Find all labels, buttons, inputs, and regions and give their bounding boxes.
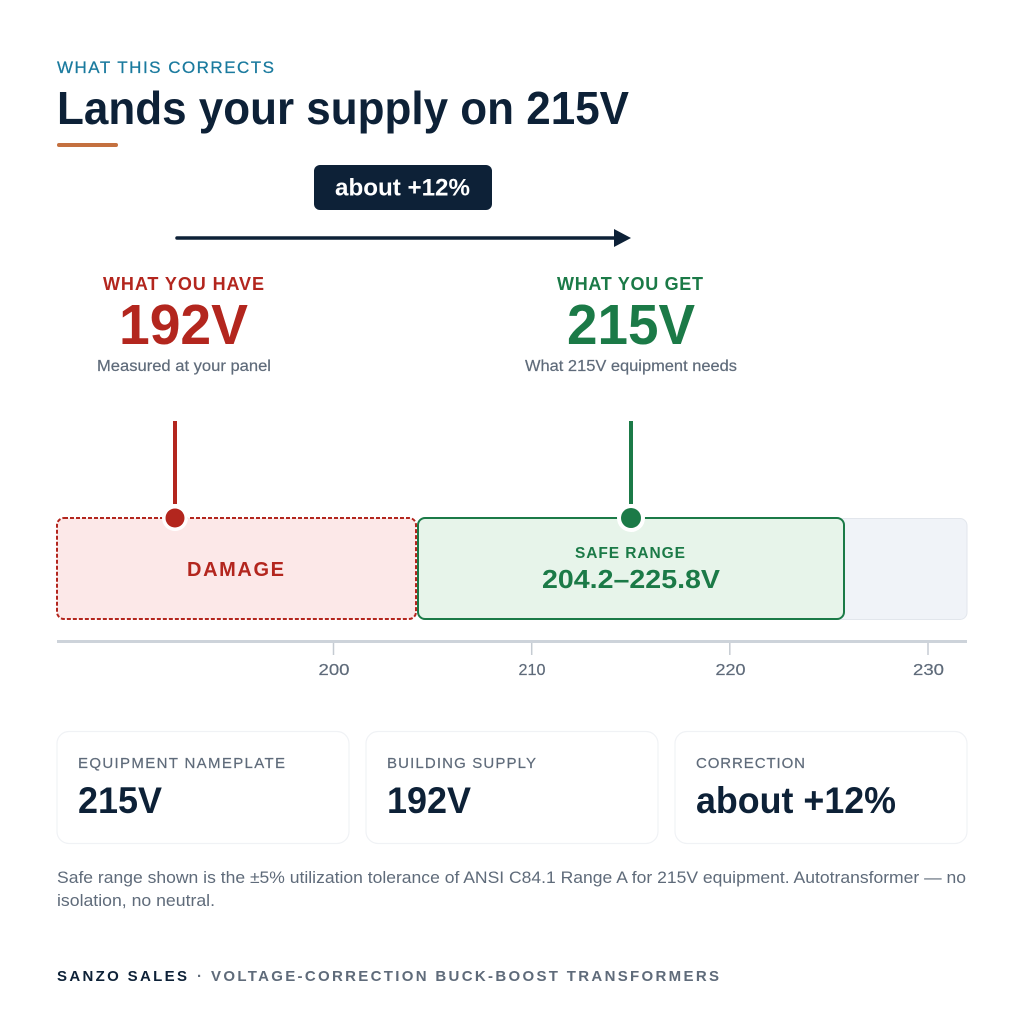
callout: what you have: 192V (119, 293, 248, 357)
card: building supply: 192V (387, 780, 471, 821)
band: safe range (418, 518, 844, 619)
voltage axis: 220 (716, 662, 746, 679)
card: correction (675, 732, 967, 844)
callout: what you get: What 215V equipment needs (525, 358, 737, 375)
band: damage zone: DAMAGE (187, 559, 284, 581)
footer brand line: VOLTAGE-CORRECTION BUCK-BOOST TRANSFORMERS (211, 968, 719, 985)
badge: about +12%: about +12% (335, 174, 470, 202)
callout: what you have: WHAT YOU HAVE (103, 274, 264, 294)
band: damage zone (57, 518, 416, 619)
voltage axis (57, 642, 967, 679)
footnote: Safe range shown is the ±5% utilization tolerance of ANSI C84.1 Range A for 215V equipment. Autotransformer — no (57, 869, 966, 887)
title accent bar (57, 143, 118, 147)
callout: what you have (97, 274, 271, 375)
footnote: isolation, no neutral. (57, 892, 215, 910)
card: correction: about +12% (696, 780, 896, 821)
callout: what you have: Measured at your panel (97, 358, 271, 375)
callout: what you get: WHAT YOU GET (557, 274, 703, 294)
card: building supply: BUILDING SUPPLY (387, 755, 536, 772)
eyebrow label: WHAT THIS CORRECTS (57, 58, 274, 77)
callout: what you get: 215V (567, 293, 695, 357)
voltage axis: 230 (913, 662, 944, 679)
voltage axis: 200 (318, 662, 350, 679)
marker: 192V pin (162, 421, 188, 531)
card: equipment nameplate: 215V (78, 780, 162, 821)
card: equipment nameplate (57, 732, 349, 844)
marker: 215V pin (617, 421, 645, 532)
band: safe range: 204.2–225.8V (542, 564, 721, 594)
title: Lands your supply on 215V (57, 82, 629, 134)
footer brand line: SANZO SALES (57, 968, 187, 985)
callout: what you get (525, 274, 737, 375)
card: equipment nameplate: EQUIPMENT NAMEPLATE (78, 755, 285, 772)
arrow: 192V to 215V (177, 229, 631, 247)
card: building supply (366, 732, 658, 844)
band: safe range: SAFE RANGE (575, 545, 685, 562)
voltage axis: 210 (518, 662, 546, 679)
band: upper out-of-range zone (800, 518, 967, 620)
card: correction: CORRECTION (696, 755, 805, 772)
footnote (57, 869, 966, 910)
badge: about +12% (314, 165, 492, 210)
footer brand line: · (197, 968, 202, 985)
